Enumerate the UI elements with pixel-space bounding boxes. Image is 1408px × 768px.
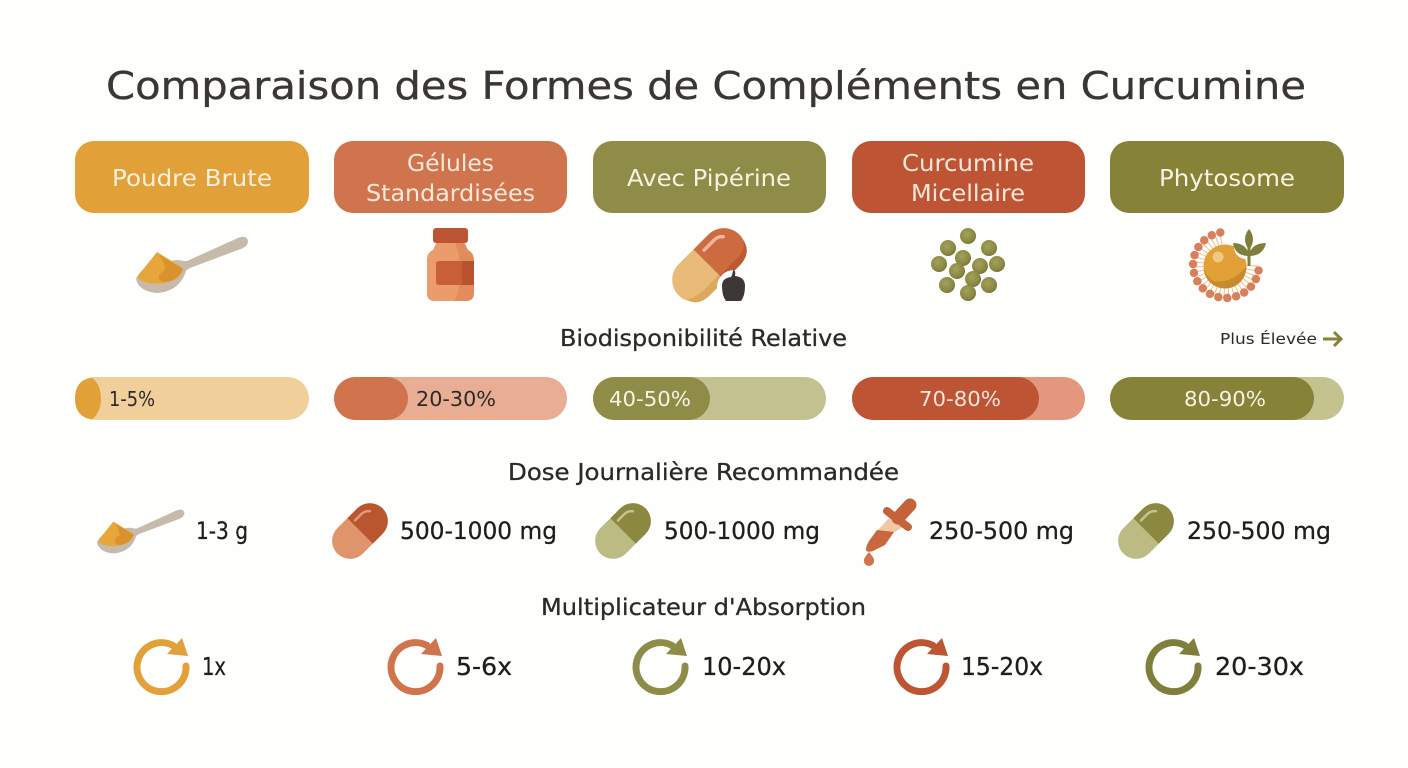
dose: capsule 500-1000 mg <box>325 496 557 566</box>
bar: 1-5%: 1-5% <box>109 387 155 411</box>
header: Curcumine Micellaire: Curcumine <box>902 151 1034 177</box>
dose: dropper 250-500 mg: 250-500 mg <box>929 517 1074 545</box>
multiplier: 20-30x: 20-30x <box>1215 652 1304 681</box>
multiplier: 15-20x <box>897 638 1043 692</box>
multiplier: 10-20x: 10-20x <box>702 652 786 681</box>
dose: dropper 250-500 mg <box>864 505 1074 566</box>
header: Avec Pipérine: Avec Pipérine <box>627 166 791 192</box>
header: Poudre Brute: Poudre Brute <box>112 166 272 192</box>
dose: capsule 250-500 mg olive: 250-500 mg <box>1187 517 1331 545</box>
header: Gélules Standardisées <box>334 141 567 213</box>
title: Comparaison des Formes de Compléments en Curcumine <box>106 64 1306 108</box>
chart: relative bioavailability bars <box>75 377 1344 420</box>
dose: capsule 500-1000 mg: 500-1000 mg <box>400 517 557 545</box>
bar: 80-90% <box>1110 377 1344 420</box>
dose: powder 1-3 g: 1-3 g <box>196 517 248 545</box>
heading: Dose Journalière Recommandée: Dose Journalière Recommandée <box>508 460 899 486</box>
multiplier: 5-6x <box>391 638 512 692</box>
icon: spoon with powder <box>136 237 248 293</box>
bar: 40-50%: 40-50% <box>609 387 691 411</box>
multiplier: 15-20x: 15-20x <box>961 652 1043 681</box>
header: Phytosome <box>1110 141 1344 213</box>
bar: 20-30%: 20-30% <box>416 387 496 411</box>
bar: 80-90%: 80-90% <box>1184 387 1266 411</box>
dose: capsule 250-500 mg olive <box>1111 496 1331 566</box>
dose: powder 1-3 g <box>97 510 248 553</box>
icon: supplement bottle <box>427 228 474 301</box>
multiplier: 1x <box>137 638 226 692</box>
heading: Biodisponibilité Relative: Biodisponibilité Relative <box>560 326 847 352</box>
arrow: increasing direction <box>1323 332 1341 346</box>
multiplier: 20-30x <box>1149 638 1304 692</box>
bar: 20-30% <box>334 377 567 420</box>
panel: absorption multipliers <box>137 638 1304 692</box>
header: Gélules Standardisées: Standardisées <box>366 181 535 207</box>
header: Phytosome: Phytosome <box>1159 166 1295 192</box>
multiplier: 5-6x: 5-6x <box>456 652 512 681</box>
panel: form headers <box>75 141 1344 213</box>
icon: phytosome <box>1193 229 1266 298</box>
header: Curcumine Micellaire: Micellaire <box>911 181 1025 207</box>
icon: micelle dots <box>931 228 1005 301</box>
multiplier: 10-20x <box>636 638 786 692</box>
label: Plus Élevée: Plus Élevée <box>1220 329 1317 348</box>
dose: capsule 500-1000 mg olive: 500-1000 mg <box>664 517 820 545</box>
multiplier: 1x: 1x <box>202 652 226 681</box>
header: Gélules Standardisées: Gélules <box>407 151 494 177</box>
heading: Multiplicateur d'Absorption: Multiplicateur d'Absorption <box>541 595 866 621</box>
header: Curcumine Micellaire <box>852 141 1085 213</box>
icon: capsule with black pepper <box>663 219 755 311</box>
dose: capsule 500-1000 mg olive <box>588 496 820 566</box>
header: Avec Pipérine <box>593 141 826 213</box>
header: Poudre Brute <box>75 141 309 213</box>
bar: 1-5% <box>75 377 309 420</box>
bar: 70-80% <box>852 377 1085 420</box>
bar: 70-80%: 70-80% <box>919 387 1001 411</box>
panel: daily doses <box>97 496 1331 566</box>
bar: 40-50% <box>593 377 826 420</box>
